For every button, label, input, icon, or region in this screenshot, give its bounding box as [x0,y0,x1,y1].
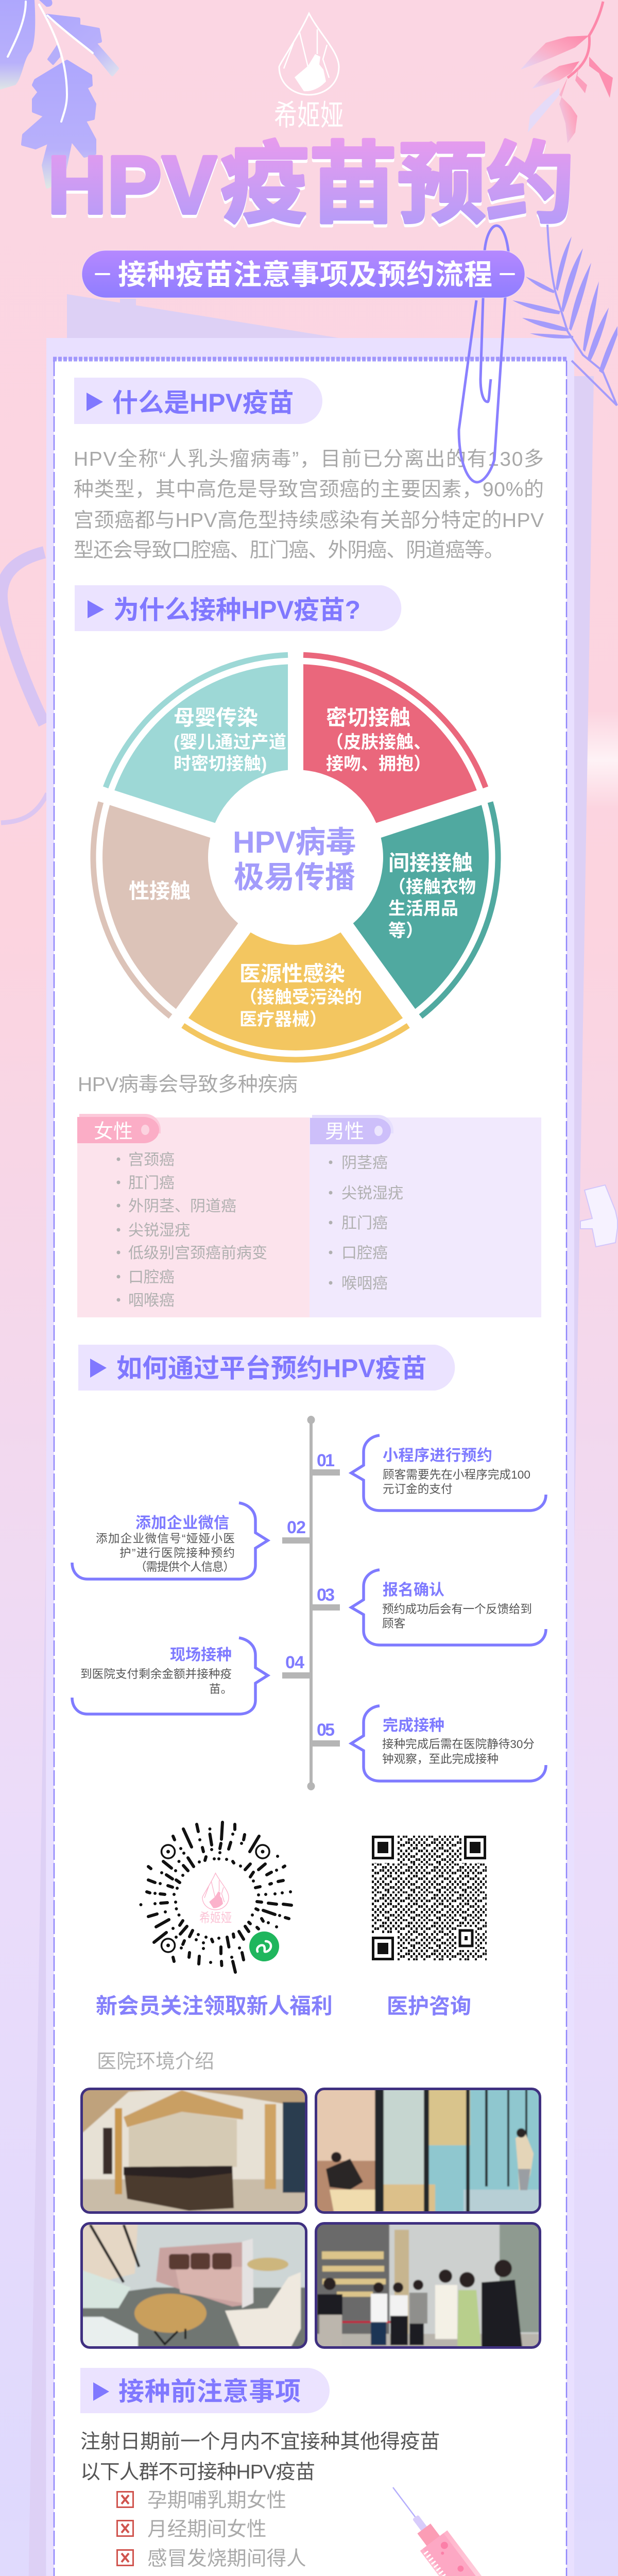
wheel label: close contact: 密切接触 [326,706,410,730]
step 05 [317,1706,546,1781]
wheel label: mother to infant: 母婴传染 [174,706,258,730]
list item 2: 月经期间女性 [147,2518,266,2540]
code center logo [202,1873,229,1910]
title [47,135,575,237]
step 03: 顾客 [382,1617,405,1630]
text block: pre-vaccination note: 以下人群不可接种HPV疫苗 [80,2461,315,2483]
photo: reception desk [77,2084,311,2217]
subtitle pill [82,250,525,298]
heading: before vaccination: 接种前注意事项 [118,2377,301,2406]
list: female diseases: 宫颈癌 [128,1151,175,1168]
step 03: 报名确认 [383,1582,444,1599]
list: male diseases: 阴茎癌 [341,1155,388,1172]
mini program code [141,1822,291,1972]
list: female diseases: 肛门癌 [128,1175,175,1192]
heading: why vaccinate [75,585,401,631]
wheel label: medical infection: 医源性感染 [239,962,345,986]
main panel: outer lavender frame [46,338,574,2576]
wheel label: mother to infant: (婴儿通过产道 [174,733,286,752]
wheel segment: indirect contact [331,802,546,1027]
step 02: 添加企业微信 [135,1515,229,1532]
text block: HPV intro [74,448,544,562]
text block: HPV intro: 宫颈癌都与HPV高危型持续感染有关部分特定的HPV [74,510,544,532]
wheel label: mother to infant [174,706,286,774]
heading: how to book: 如何通过平台预约HPV疫苗 [116,1354,427,1383]
list item 1: 孕期哺乳期女性 [147,2489,286,2512]
decoration: top-right pink leaves [521,2,613,143]
code logo text: 希姬娅 [199,1910,232,1925]
step 01: 顾客需要先在小程序完成100 [383,1468,530,1481]
tag: female [77,1114,161,1143]
qr code [371,1835,488,1961]
caption: medical consultation: 医护咨询 [387,1994,471,2018]
panel: male diseases [310,1115,541,1317]
wheel label: sexual contact: 性接触 [129,880,191,903]
logo top [274,13,344,131]
step 01: 元订金的支付 [383,1483,453,1496]
main panel: stamp edge stripes [53,359,566,2576]
text: diseases caused by HPV: HPV病毒会导致多种疾病 [78,1074,298,1096]
timeline axis [282,1416,340,1790]
wheel segment: mother to infant [106,614,322,839]
wheel label: close contact: （皮肤接触、 [326,733,431,752]
step 05: 钟观察，至此完成接种 [382,1753,499,1766]
panel: female diseases [77,1114,310,1317]
step 01 [317,1435,546,1511]
step 04: 苗。 [209,1683,232,1696]
tag: female: 女性 [94,1121,133,1143]
decoration: top-left purple leaves [0,0,117,187]
heading: what is HPV vaccine [74,378,322,424]
step 02 [72,1503,306,1579]
timeline: booking steps [72,1416,546,1790]
step 01: 小程序进行预约 [383,1447,492,1464]
list: male diseases [329,1155,403,1292]
step 01: 01 [317,1451,335,1470]
text block: HPV intro: HPV全称“人乳头瘤病毒”，目前已分离出的有130多 [74,448,544,470]
checklist: contraindications [117,2489,485,2576]
step 02: 添加企业微信号“娅娅小医 [96,1532,235,1545]
text block: HPV intro: 型还会导致口腔癌、肛门癌、外阴癌、阴道癌等。 [74,539,504,562]
list item 3: 感冒发烧期间得人 [147,2548,306,2570]
text block: pre-vaccination note [80,2431,440,2483]
heading: why vaccinate: 为什么接种HPV疫苗? [113,596,360,624]
step 03: 预约成功后会有一个反馈给到 [382,1603,532,1616]
list: male diseases: 肛门癌 [341,1215,388,1232]
wheel hub text: HPV病毒 [233,825,356,859]
list: female diseases [116,1151,267,1309]
logo top: 希姬娅 [274,99,344,131]
step 02: （需提供个人信息） [135,1561,235,1573]
list: female diseases: 咽喉癌 [128,1292,175,1309]
wheel label: indirect contact: 间接接触 [388,851,473,875]
wheel segment: medical infection [162,890,408,1133]
caption: new member: 新会员关注领取新人福利 [96,1994,333,2018]
step 02: 02 [287,1518,306,1537]
photo: lounge [312,2084,544,2217]
wheel label: indirect contact [388,851,476,941]
step 05: 完成接种 [383,1717,444,1734]
wheel label: indirect contact: 等） [388,921,423,941]
list: male diseases: 口腔癌 [341,1245,388,1262]
photo: visitors in hallway [312,2219,544,2352]
wheel label: indirect contact: 生活用品 [388,899,458,919]
wheel segment: sexual contact [23,773,269,1016]
wheel label: indirect contact: （接触衣物 [388,877,476,897]
decoration: paperclip [459,226,508,482]
heading: what is HPV vaccine: 什么是HPV疫苗 [112,388,294,417]
photo: sofa area [77,2219,311,2352]
wheel label: medical infection [239,962,362,1029]
subtitle pill: 接种疫苗注意事项及预约流程 [118,259,492,291]
tag: male [310,1115,393,1144]
wheel hub text [233,825,356,894]
decoration: right background highlights [580,711,618,1247]
wheel chart: transmission routes [23,614,546,1133]
step 04: 到医院支付剩余金额并接种疫 [80,1668,232,1681]
wheel hub text: 极易传播 [234,860,355,894]
step 03 [317,1570,546,1645]
title: HPV [47,139,217,231]
step 04: 现场接种 [170,1647,232,1664]
step 03: 03 [317,1585,335,1605]
step 04 [72,1638,304,1714]
wheel label: close contact [326,706,431,774]
code finder rings [162,1845,269,1952]
step 05: 接种完成后需在医院静待30分 [382,1738,535,1751]
heading: before vaccination [80,2368,330,2413]
step 04: 04 [285,1653,304,1672]
step 02: 护”进行医院接种预约 [119,1547,235,1560]
title: 疫苗预约 [220,135,575,234]
decoration: left ribbon [1,552,47,823]
title: HPV [47,142,217,234]
list: female diseases: 口腔癌 [128,1269,175,1286]
title: 疫苗预约 [220,138,575,237]
text: hospital environment: 医院环境介绍 [97,2051,214,2073]
decoration: purple fern [512,225,617,405]
list: male diseases: 喉咽癌 [341,1275,388,1292]
main panel: white sheet [54,360,566,2576]
text block: HPV intro: 种类型，其中高危是导致宫颈癌的主要因素，90%的 [74,479,544,501]
wheel segment: close contact [303,655,486,823]
step 05: 05 [317,1720,335,1740]
illustration: syringe [367,2468,548,2576]
tag: male: 男性 [325,1121,364,1143]
wheel label: close contact: 接吻、拥抱） [326,754,431,774]
list: female diseases: 尖锐湿疣 [128,1222,190,1239]
list: female diseases: 外阴茎、阴道癌 [128,1198,236,1215]
wheel label: medical infection: （接触受污染的 [239,988,362,1007]
list: female diseases: 低级别宫颈癌前病变 [128,1245,267,1262]
wheel label: medical infection: 医疗器械） [239,1010,327,1029]
text block: pre-vaccination note: 注射日期前一个月内不宜接种其他得疫苗 [80,2431,440,2453]
list: male diseases: 尖锐湿疣 [341,1185,403,1202]
heading: how to book [78,1345,455,1391]
wheel label: mother to infant: 时密切接触) [174,754,267,774]
icon: mini program badge [249,1931,279,1961]
